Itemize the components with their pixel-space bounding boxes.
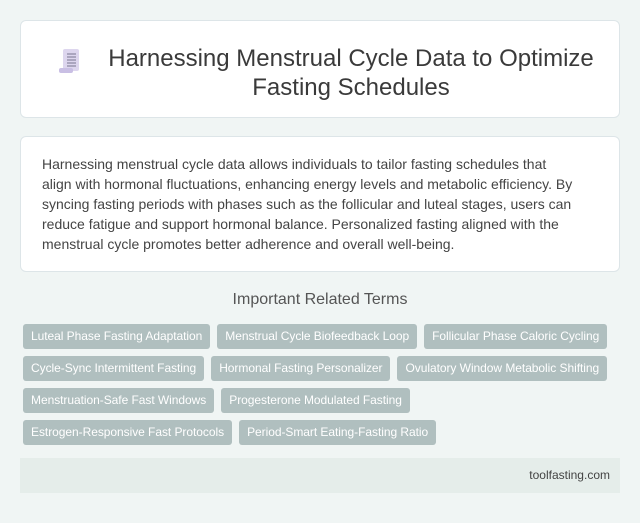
related terms heading: Important Related Terms bbox=[233, 291, 407, 308]
description text: Harnessing menstrual cycle data allows individuals to tailor fasting schedules that align with hormonal fluctuations, enhancing energy levels and metabolic efficiency. By syncing fasting periods with phases such as the follicular and luteal stages, users can reduce fatigue and support hormonal balance. Personalized fasting aligned with the menstrual cycle promotes better adherence and overall well-being. bbox=[42, 156, 572, 252]
tags: Period-Smart Eating-Fasting Ratio bbox=[247, 425, 428, 439]
description card bbox=[20, 136, 620, 272]
tags: Luteal Phase Fasting Adaptation bbox=[31, 329, 202, 343]
footer source text: toolfasting.com bbox=[529, 468, 610, 482]
tags: Menstruation-Safe Fast Windows bbox=[31, 393, 206, 407]
tags: Progesterone Modulated Fasting bbox=[229, 393, 402, 407]
tags: Menstrual Cycle Biofeedback Loop bbox=[225, 329, 409, 343]
icon: document scroll bbox=[59, 49, 79, 73]
title: Harnessing Menstrual Cycle Data to Optimize Fasting Schedules bbox=[108, 45, 594, 101]
tags: Hormonal Fasting Personalizer bbox=[219, 361, 382, 375]
tags: Estrogen-Responsive Fast Protocols bbox=[31, 425, 224, 439]
tags bbox=[23, 324, 607, 445]
title card bbox=[20, 20, 620, 118]
tags: Cycle-Sync Intermittent Fasting bbox=[31, 361, 196, 375]
footer bbox=[20, 458, 620, 493]
tags: Ovulatory Window Metabolic Shifting bbox=[405, 361, 599, 375]
tags: Follicular Phase Caloric Cycling bbox=[432, 329, 599, 343]
